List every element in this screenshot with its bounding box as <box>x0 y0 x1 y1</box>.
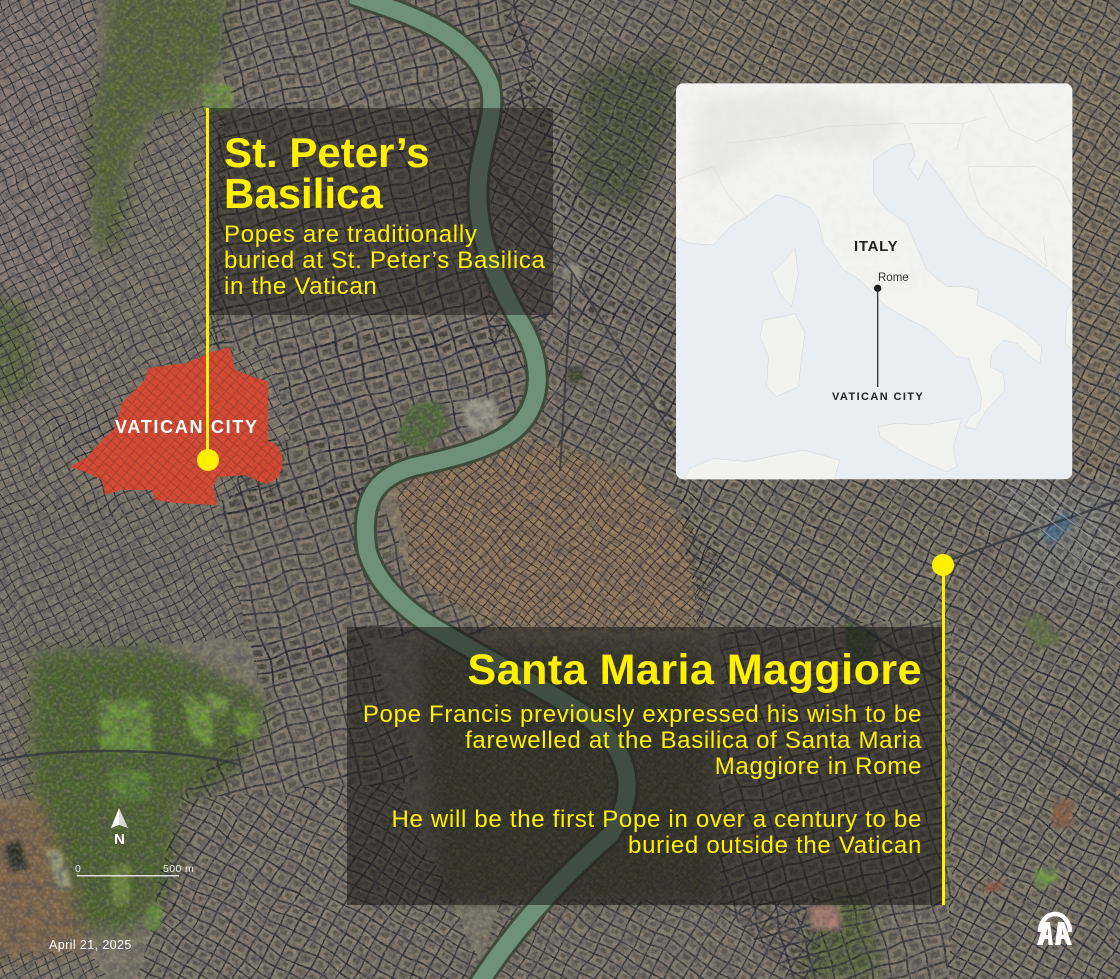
text: St. Peter's description: buried at St. Peter’s Basilica <box>224 247 546 274</box>
heading: Santa Maria Maggiore: Santa Maria Maggiore <box>468 646 922 694</box>
land: Greek and Albanian edge <box>1064 300 1072 350</box>
text: St. Peter's description: in the Vatican <box>224 273 377 300</box>
text: St. Peter's description <box>224 221 546 300</box>
panel: Santa Maria Maggiore background <box>347 627 944 905</box>
scale bar: 0 <box>75 863 81 875</box>
label: N: N <box>114 831 125 848</box>
text: Santa Maria Maggiore description <box>363 701 922 859</box>
label: Rome: Rome <box>878 272 909 284</box>
date: April 21, 2025 <box>49 938 132 952</box>
heading: St. Peter's Basilica: St. Peter’s <box>224 129 429 176</box>
text: Santa Maria Maggiore description: Maggiore in Rome <box>715 753 922 780</box>
borders <box>677 83 1072 267</box>
Rome leader line <box>877 288 878 387</box>
land: Tunisia coast <box>683 450 840 482</box>
heading: St. Peter's Basilica <box>224 129 429 217</box>
Rome marker <box>874 285 881 292</box>
scale bar: 500 m <box>163 863 194 875</box>
label: Vatican City on inset: VATICAN CITY <box>832 391 924 403</box>
land: Corsica <box>772 248 798 307</box>
text: St. Peter's description: Popes are traditionally <box>224 221 478 248</box>
inset map: Italy <box>676 83 1072 480</box>
label: ITALY: ITALY <box>854 238 898 255</box>
text: Santa Maria Maggiore description: Pope Francis previously expressed his wish to be <box>363 701 922 728</box>
land: Sicily <box>878 418 962 472</box>
panel: St. Peter's background <box>207 108 553 315</box>
text: Santa Maria Maggiore description: buried outside the Vatican <box>628 832 922 859</box>
text: Santa Maria Maggiore description: farewelled at the Basilica of Santa Maria <box>465 727 922 754</box>
heading: St. Peter's Basilica: Basilica <box>224 170 383 217</box>
text: Santa Maria Maggiore description: He will be the first Pope in over a century to be <box>391 806 922 833</box>
land: Sardinia <box>760 313 805 397</box>
relief shading: Alps <box>697 92 894 176</box>
land: mainland Europe and Italy <box>673 80 1075 429</box>
label: Vatican City on map: VATICAN CITY <box>115 417 259 437</box>
